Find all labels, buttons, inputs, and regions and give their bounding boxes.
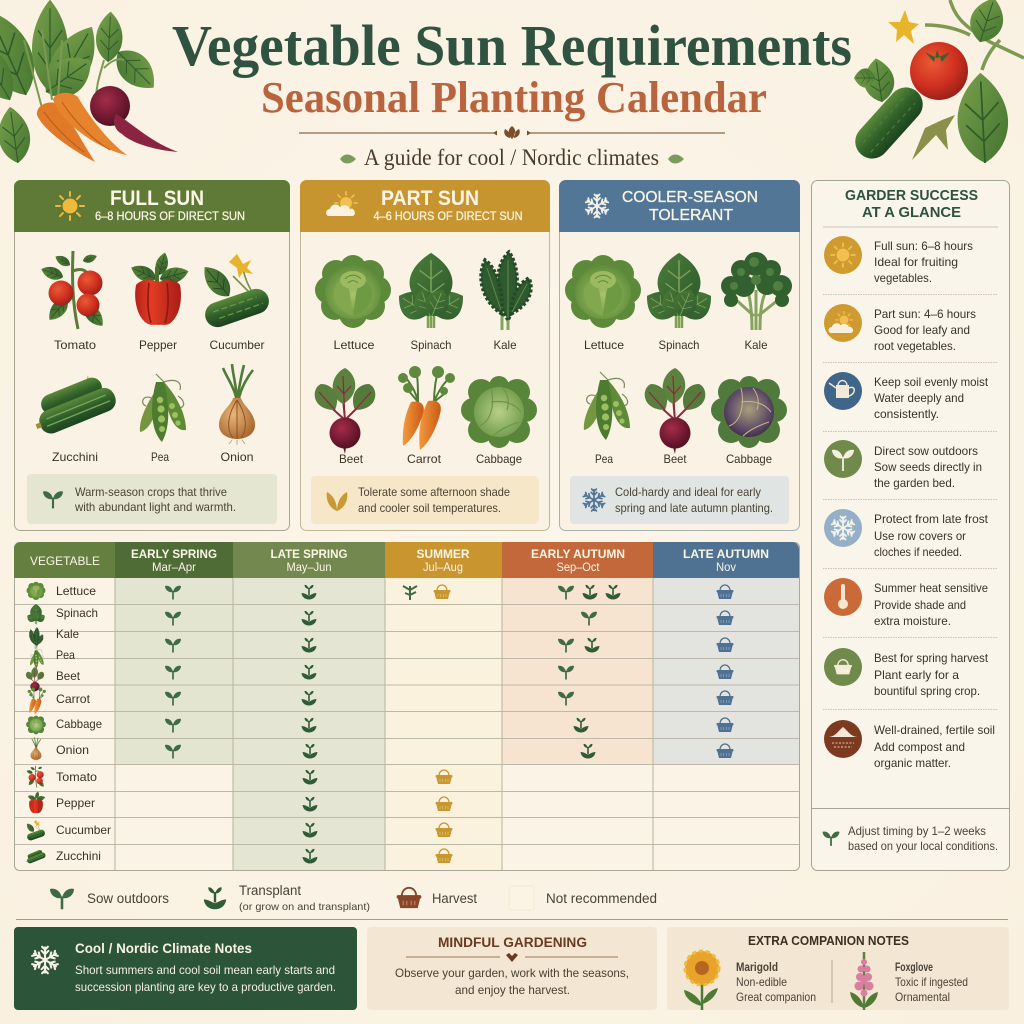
vegetable: pea [584, 372, 630, 466]
header: part sun: PART SUN [381, 187, 479, 210]
tip: soil moisture: consistently. [874, 407, 939, 421]
panel: extra companion notes: Ornamental [895, 990, 950, 1004]
tip: summer heat [824, 578, 988, 628]
header cell: late autumn: Nov [716, 562, 736, 574]
tip: late frost: Use row covers or [874, 529, 966, 543]
vegetable: pea: Pea [595, 452, 613, 466]
note: part sun: Tolerate some afternoon shade [358, 485, 510, 499]
vegetable: spinach [640, 253, 718, 352]
header cell: early autumn [502, 542, 653, 578]
header: full sun: 6–8 HOURS OF DIRECT SUN [95, 209, 245, 223]
vegetable: spinach: Spinach [658, 338, 700, 352]
tip: direct sow: Direct sow outdoors [874, 444, 978, 458]
tip: fertile soil: Add compost and [874, 740, 965, 754]
vegetable: carrot: Carrot [407, 452, 442, 466]
illustration: root vegetables top left [0, 0, 178, 165]
header cell: vegetable: VEGETABLE [30, 554, 100, 568]
planting calendar table [14, 542, 800, 870]
sidebar footer tip [823, 824, 998, 853]
legend: transplant [204, 883, 370, 913]
header cell: early spring [115, 542, 233, 578]
row labels and icons: Lettuce [56, 584, 96, 598]
header: cooler-season: TOLERANT [649, 207, 733, 224]
tip: late frost: cloches if needed. [874, 545, 962, 559]
header cell: late spring: LATE SPRING [270, 547, 348, 561]
panel: garden success sidebar [812, 180, 1010, 870]
vegetable: lettuce: Lettuce [334, 338, 375, 352]
row labels and icons: Beet [56, 669, 81, 683]
tip: late frost [824, 509, 989, 559]
panel: extra companion notes: Foxglove [895, 960, 933, 974]
header cell: late spring: May–Jun [286, 562, 332, 574]
vegetable: pea: Pea [151, 450, 169, 464]
header cell: summer [385, 542, 502, 578]
row labels and icons: Pepper [56, 796, 95, 810]
vegetable: beet [645, 368, 705, 466]
tip: full sun: Full sun: 6–8 hours [874, 239, 973, 253]
panel: cool nordic climate notes: Short summers and cool soil mean early starts and [75, 963, 335, 977]
tagline: A guide for cool / Nordic climates [364, 145, 659, 170]
legend: sow outdoors [50, 889, 169, 909]
header: cooler-season [559, 180, 800, 232]
legend: harvest [397, 888, 477, 908]
row labels and icons: Zucchini [56, 849, 101, 863]
vegetable: lettuce [565, 255, 641, 352]
panel: extra companion notes: Toxic if ingested [895, 975, 968, 989]
legend: not recommended: Not recommended [546, 891, 657, 906]
legend [50, 883, 657, 913]
tip: spring harvest: Plant early for a [874, 668, 959, 682]
panel: full sun [14, 180, 290, 530]
subtitle: Seasonal Planting Calendar [261, 73, 767, 122]
early autumn icons [558, 585, 620, 758]
panel: extra companion notes: EXTRA COMPANION NOTES [748, 934, 909, 948]
panel: extra companion notes: Non-edible [736, 975, 787, 989]
header: cooler-season: COOLER-SEASON [622, 189, 758, 206]
tip: part sun: Good for leafy and [874, 323, 970, 337]
late spring transplant icons [302, 585, 318, 864]
row labels and icons: Pea [56, 648, 75, 662]
tip: direct sow: Sow seeds directly in [874, 460, 982, 474]
tip: late frost: Protect from late frost [874, 512, 989, 526]
note: part sun: and cooler soil temperatures. [358, 501, 501, 515]
panel: part sun [300, 180, 550, 530]
header cell: vegetable [14, 542, 115, 578]
tip: summer heat: Summer heat sensitive [874, 581, 988, 595]
header cell: early spring: Mar–Apr [152, 562, 196, 574]
tip: summer heat: extra moisture. [874, 614, 951, 628]
tip: part sun: root vegetables. [874, 339, 956, 353]
panel: mindful gardening [367, 927, 657, 1010]
note: full sun: Warm-season crops that thrive [75, 485, 227, 499]
row labels and icons: Tomato [56, 770, 97, 784]
vegetable: cabbage [711, 376, 787, 466]
sidebar heading: AT A GLANCE [862, 204, 961, 221]
header: part sun [300, 180, 550, 232]
foxglove [850, 952, 878, 1010]
vegetable: cabbage [461, 376, 537, 466]
vegetable: tomato: Tomato [54, 338, 96, 352]
vegetable: zucchini: Zucchini [52, 450, 98, 464]
vegetable: kale: Kale [744, 338, 768, 352]
row labels and icons: Kale [56, 627, 79, 641]
vegetable: beet [315, 368, 375, 466]
title ornament divider [299, 126, 725, 139]
tip: soil moisture: Water deeply and [874, 391, 964, 405]
row labels and icons: Spinach [56, 606, 98, 620]
tip: fertile soil: Well-drained, fertile soil [874, 723, 995, 737]
row labels and icons: Cabbage [56, 717, 102, 731]
header cell: early spring: EARLY SPRING [131, 547, 217, 561]
tip: full sun [824, 236, 973, 285]
vegetable: onion: Onion [220, 450, 254, 464]
panel: cool nordic climate notes: Cool / Nordic Climate Notes [75, 941, 252, 956]
note: cooler-season [570, 476, 789, 524]
header cell: late autumn [653, 542, 799, 578]
vegetable: cucumber [197, 254, 272, 352]
vegetable: cucumber: Cucumber [210, 338, 264, 352]
vegetable: spinach: Spinach [410, 338, 452, 352]
vegetable: cabbage: Cabbage [476, 452, 522, 466]
sidebar footer tip: based on your local conditions. [848, 839, 998, 853]
table backgrounds [14, 542, 800, 870]
panel: mindful gardening: Observe your garden, work with the seasons, [395, 966, 629, 980]
header: full sun [14, 180, 290, 232]
panel: mindful gardening: MINDFUL GARDENING [438, 935, 587, 950]
tip: spring harvest: bountiful spring crop. [874, 684, 980, 698]
legend: not recommended [509, 886, 657, 910]
vegetable: kale [481, 252, 531, 352]
header cell: late autumn: LATE AUTUMN [683, 547, 769, 561]
vegetable: beet: Beet [664, 452, 687, 466]
panel: extra companion notes: Marigold [736, 960, 778, 974]
illustration: tomato and cucumber top right [848, 0, 1024, 166]
vegetable: lettuce [315, 255, 391, 352]
header cell: late spring [233, 542, 385, 578]
panel: cool nordic climate notes [14, 927, 357, 1010]
note: cooler-season: Cold-hardy and ideal for early [615, 485, 761, 499]
legend: transplant: (or grow on and transplant) [239, 901, 370, 913]
vegetable: kale: Kale [494, 338, 517, 352]
panel: mindful gardening: and enjoy the harvest. [455, 983, 570, 997]
sidebar footer tip: Adjust timing by 1–2 weeks [848, 824, 986, 838]
legend: transplant: Transplant [239, 883, 301, 898]
vegetable: pea [140, 374, 186, 464]
tip: direct sow [824, 440, 982, 490]
vegetable: lettuce: Lettuce [584, 338, 624, 352]
vegetable: cabbage: Cabbage [726, 452, 772, 466]
tip: direct sow: the garden bed. [874, 476, 955, 490]
title: Vegetable Sun Requirements [172, 13, 852, 78]
note: cooler-season: spring and late autumn planting. [615, 501, 773, 515]
tip: part sun [824, 304, 976, 353]
header cell: summer: SUMMER [416, 547, 470, 561]
sidebar heading [845, 187, 978, 221]
sidebar heading: GARDER SUCCESS [845, 187, 978, 204]
late autumn harvest icons [716, 585, 734, 758]
legend: sow outdoors: Sow outdoors [87, 891, 169, 906]
vegetable: carrot [398, 366, 455, 466]
row labels and icons [24, 582, 111, 865]
vegetable: beet: Beet [339, 452, 364, 466]
summer icons [403, 585, 452, 863]
vegetable: pepper: Pepper [139, 338, 177, 352]
tip: spring harvest: Best for spring harvest [874, 651, 989, 665]
panel: cool nordic climate notes: succession planting are key to a productive garden. [75, 980, 336, 994]
note: full sun [27, 474, 277, 524]
vegetable: onion [219, 364, 255, 464]
panel: extra companion notes [667, 927, 1009, 1010]
header: part sun: 4–6 HOURS OF DIRECT SUN [374, 209, 522, 223]
legend: harvest: Harvest [432, 891, 477, 906]
header: full sun: FULL SUN [110, 187, 204, 210]
vegetable: tomato [39, 251, 108, 352]
tip: fertile soil: organic matter. [874, 756, 951, 770]
row labels and icons: Carrot [56, 692, 91, 706]
panel: extra companion notes: Great companion [736, 990, 816, 1004]
header cell: early autumn: EARLY AUTUMN [531, 547, 625, 561]
row labels and icons: Onion [56, 743, 89, 757]
header cell: early autumn: Sep–Oct [556, 562, 600, 574]
tip: spring harvest [824, 648, 989, 698]
early spring sowing icons [165, 586, 181, 758]
vegetable: zucchini [27, 372, 119, 464]
tip: summer heat: Provide shade and [874, 598, 966, 612]
tip: full sun: vegetables. [874, 271, 932, 285]
tip: soil moisture: Keep soil evenly moist [874, 375, 989, 389]
tip: fertile soil [824, 720, 995, 770]
row labels and icons: Cucumber [56, 823, 111, 837]
vegetable: spinach [392, 253, 470, 352]
note: part sun [311, 476, 539, 524]
vegetable: pepper [128, 251, 190, 352]
vegetable: kale [721, 252, 792, 352]
panel: cooler-season tolerant [559, 180, 800, 530]
tip: full sun: Ideal for fruiting [874, 255, 958, 269]
tip: soil moisture [824, 372, 989, 421]
header cell: summer: Jul–Aug [423, 562, 463, 574]
tip: part sun: Part sun: 4–6 hours [874, 307, 976, 321]
note: full sun: with abundant light and warmth. [74, 500, 236, 514]
marigold [684, 951, 719, 1010]
